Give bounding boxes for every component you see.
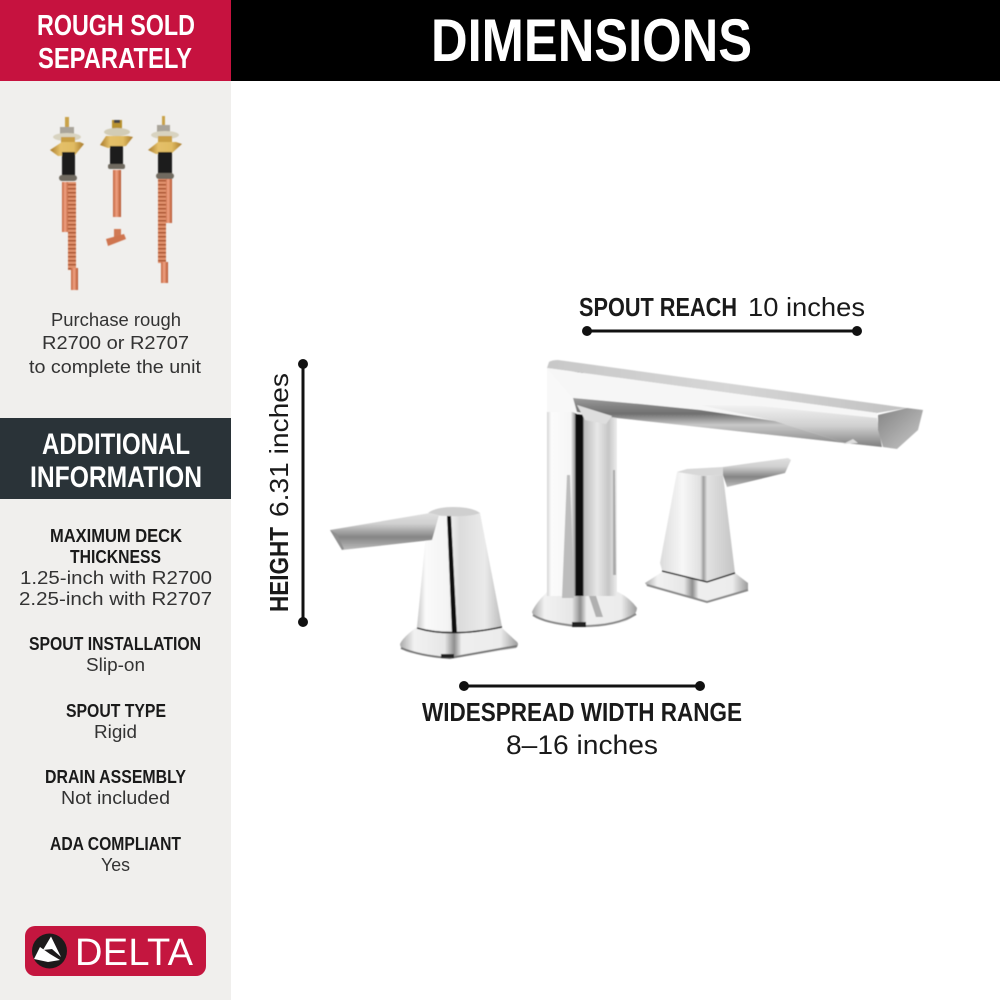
dimension: height xyxy=(264,359,308,627)
text: purchase rough note: R2700 or R2707 xyxy=(42,333,189,353)
text: maximum deck thickness: MAXIMUM DECK xyxy=(50,526,182,546)
dimension: height: 6.31 inches xyxy=(264,373,294,517)
text: maximum deck thickness: 1.25-inch with R2700 xyxy=(20,568,212,588)
dimension: widespread width range: 8–16 inches xyxy=(506,730,658,760)
rough valve center xyxy=(100,120,133,246)
text: spout installation: Slip-on xyxy=(86,655,145,675)
text: ada compliant: Yes xyxy=(101,855,130,875)
text: maximum deck thickness xyxy=(19,526,212,609)
text: ada compliant xyxy=(50,834,181,875)
panel: rough sold separately header: SEPARATELY xyxy=(38,43,192,75)
text: drain assembly: DRAIN ASSEMBLY xyxy=(45,767,186,787)
rough valve left xyxy=(50,117,84,290)
text: spout type xyxy=(66,701,166,742)
text: spout type: SPOUT TYPE xyxy=(66,701,166,721)
text: purchase rough note xyxy=(29,310,201,377)
title: dimensions header xyxy=(231,0,1000,81)
text: ada compliant: ADA COMPLIANT xyxy=(50,834,181,854)
image: chrome faucet set xyxy=(330,360,923,658)
dimension: widespread width range xyxy=(422,681,742,760)
dimension: widespread width range: WIDESPREAD WIDTH RANGE xyxy=(422,697,742,727)
faucet spout xyxy=(532,360,923,627)
panel: additional information header xyxy=(0,418,231,499)
logo: delta: DELTA xyxy=(75,932,194,974)
text: spout installation xyxy=(29,634,201,675)
text: maximum deck thickness: 2.25-inch with R2707 xyxy=(19,589,212,609)
text: drain assembly xyxy=(45,767,186,808)
rough valve right xyxy=(148,116,182,283)
panel: rough sold separately header xyxy=(0,0,231,81)
dimension: height: HEIGHT xyxy=(264,527,294,612)
faucet right handle xyxy=(645,458,791,602)
dimension: spout reach: SPOUT REACH xyxy=(579,292,737,322)
panel: rough sold separately header: ROUGH SOLD xyxy=(37,10,195,42)
logo: delta xyxy=(25,926,206,976)
text: purchase rough note: to complete the unit xyxy=(29,357,201,377)
sidebar panel background xyxy=(0,0,231,1000)
text: spout type: Rigid xyxy=(94,722,137,742)
title: dimensions header: DIMENSIONS xyxy=(431,7,752,74)
text: purchase rough note: Purchase rough xyxy=(51,310,181,330)
text: spout installation: SPOUT INSTALLATION xyxy=(29,634,201,654)
panel: additional information header: ADDITIONAL xyxy=(42,428,190,461)
dimension: spout reach: 10 inches xyxy=(748,292,865,322)
text: maximum deck thickness: THICKNESS xyxy=(70,547,161,567)
text: drain assembly: Not included xyxy=(61,788,170,808)
faucet left handle xyxy=(330,507,518,658)
dimension: spout reach xyxy=(579,292,865,336)
image: rough valve parts xyxy=(50,116,182,290)
panel: additional information header: INFORMATION xyxy=(30,461,202,494)
